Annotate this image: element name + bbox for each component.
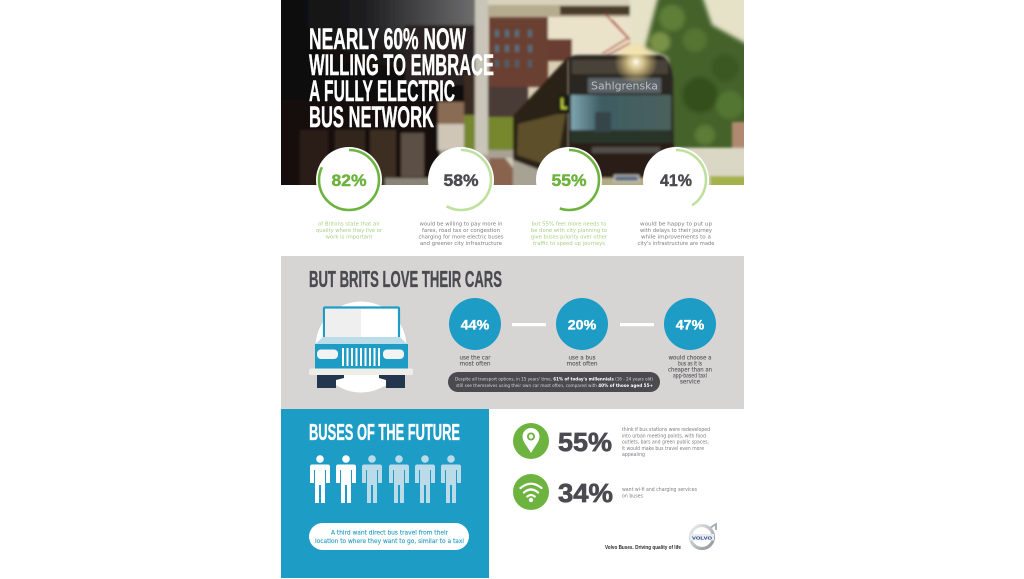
stat: 58% pay more: fares, road tax or congestion [422, 228, 500, 234]
stat: 20% use a bus: use a bus [568, 356, 596, 362]
stat: 41% put up with delays: with delays to their journey [640, 228, 713, 234]
icon: Volvo logo [690, 524, 716, 548]
tagline: Volvo Buses. Driving quality of life [605, 545, 681, 551]
stat: 47% choose a bus: bus as it is [678, 362, 702, 368]
stat: 58% pay more: and greener city infrastructure [420, 241, 503, 247]
stat: 55% bus priority: be done with city planning to [531, 228, 608, 234]
stat: 34% wi-fi and charging: 34% [558, 480, 613, 508]
panel: buses of the future [281, 409, 489, 578]
stat: 58% pay more: charging for more electric buses [418, 234, 504, 240]
stat: 82% air quality: work is important [326, 234, 373, 240]
icon: car front view [309, 302, 413, 392]
stat: 47% choose a bus [664, 298, 716, 386]
stat: 41% put up with delays: while improvements to a [641, 234, 711, 240]
icon: Volvo logo: VOLVO [692, 535, 712, 541]
icon: sun glare [615, 42, 657, 83]
pictogram: two of six people highlighted [310, 455, 461, 503]
stat: 55% redeveloped bus stations: into urban meeting points, with food [622, 433, 706, 439]
heading: cars: BUT BRITS LOVE THEIR CARS [309, 266, 502, 292]
stat: 82% air quality: quality where they live or [316, 228, 383, 234]
stat: 34% wi-fi and charging: want wi-fi and charging services [622, 487, 697, 493]
stat: 55% redeveloped bus stations: 55% [558, 429, 612, 457]
stat: 82% air quality [316, 147, 383, 240]
callout: a third want direct bus travel [309, 523, 469, 550]
stat: 20% use a bus: 20% [568, 316, 597, 332]
stat: 55% redeveloped bus stations: think if bus stations were redeveloped [622, 427, 710, 433]
stat: 55% bus priority [531, 147, 608, 247]
icon: location pin [513, 423, 549, 459]
stat: 41% put up with delays [638, 147, 715, 247]
callout: millennials: still see themselves using their own car most often, compared with 40% of those aged 55+ [456, 383, 653, 389]
stat: 55% bus priority: but 55% feel more needs to [532, 222, 607, 228]
stat: 58% pay more [418, 147, 504, 247]
title: WILLING TO EMBRACE [309, 49, 494, 82]
icon: wi-fi [513, 474, 549, 510]
stat: 47% choose a bus: service [680, 380, 700, 386]
stat: 58% pay more: 58% [444, 172, 479, 190]
stat: 55% bus priority: give buses priority over other [531, 234, 608, 240]
stat: 55% redeveloped bus stations: it would make bus travel even more [622, 446, 705, 452]
stat: 44% use the car [449, 298, 501, 368]
stat: 44% use the car: 44% [461, 316, 490, 332]
stat: 47% choose a bus: app-based taxi [673, 374, 707, 380]
stat: 58% pay more: would be willing to pay more in [420, 222, 503, 228]
bus destination display text: Sahlgrenska [591, 80, 658, 92]
callout: a third want direct bus travel: location to where they want to go, similar to a taxi [315, 537, 464, 545]
callout: a third want direct bus travel: A third want direct bus travel from their [331, 528, 448, 536]
stat: 82% air quality: of Britons state that air [318, 222, 381, 228]
panel: hero photo of electric bus [270, 0, 754, 195]
connector [620, 323, 654, 326]
stat: 55% redeveloped bus stations: outlets, bars and green public spaces, [622, 440, 709, 446]
stat: 47% choose a bus: would choose a [668, 356, 712, 362]
connector [512, 323, 546, 326]
stat: 20% use a bus: most often [566, 362, 598, 368]
stat: 82% air quality: 82% [332, 172, 367, 190]
stat: 34% wi-fi and charging: on buses [622, 493, 643, 499]
stat: 20% use a bus [556, 298, 608, 368]
title [309, 23, 494, 134]
tree foliage [645, 0, 754, 150]
stat: 47% choose a bus: 47% [676, 316, 705, 332]
callout: millennials: Despite all transport options, in 15 years' time, 61% of today's millennials (16 - 24 years old) [455, 376, 653, 382]
stat: 34% wi-fi and charging [513, 474, 697, 510]
stat: 47% choose a bus: cheaper than an [668, 368, 712, 374]
callout: millennials [448, 372, 660, 392]
stat: 55% bus priority: 55% [552, 172, 587, 190]
stat: 44% use the car: most often [460, 362, 491, 368]
title: BUS NETWORK [309, 101, 434, 134]
stat: 44% use the car: use the car [460, 356, 491, 362]
stat: 41% put up with delays: 41% [660, 172, 692, 190]
stat: 55% redeveloped bus stations: appealing [622, 452, 645, 458]
stat: 55% redeveloped bus stations [513, 423, 710, 459]
stat: 41% put up with delays: would be happy to put up [640, 222, 712, 228]
stat: 55% bus priority: traffic to speed up journeys [533, 241, 605, 247]
panel: but Brits love their cars [281, 256, 744, 409]
stat: 41% put up with delays: city's infrastructure are made [638, 241, 715, 247]
heading: future: BUSES OF THE FUTURE [309, 419, 460, 445]
title: A FULLY ELECTRIC [309, 75, 455, 108]
title: NEARLY 60% NOW [309, 23, 466, 56]
